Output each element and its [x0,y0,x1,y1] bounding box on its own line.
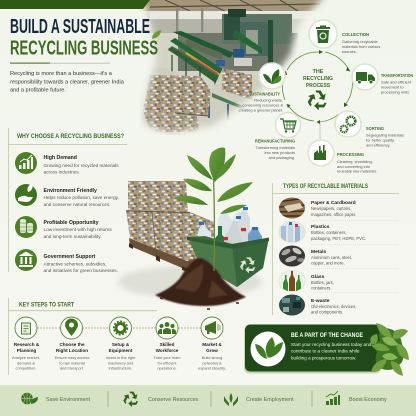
step: processing [308,140,377,174]
item: paper: Paper & Cardboard [311,200,356,206]
item: plastics: Bottles, containers, [311,230,347,235]
step: location: to raw material [59,360,85,366]
item: plastics [278,221,366,243]
heading: WHY CHOOSE A RECYCLING BUSINESS? [17,133,124,140]
panel: recycling process [239,20,413,174]
item: metals: Aluminum cans, steel, [311,255,352,260]
benefit: save environment: Save Environment [46,397,91,403]
step: setup [106,317,136,370]
item: profitable opportunity: and long-term sustainability. [44,234,102,239]
callout text: building a prosperous tomorrow. [291,356,356,360]
panel: why choose [8,128,127,273]
step: location: Right Location [56,348,88,353]
step: sustainability: Reducing waste, [254,98,283,102]
item: plastics: Plastics [311,224,330,230]
step: location: Ensure easy access [55,355,89,360]
plant [173,148,253,271]
step: workforce [153,317,181,370]
item: government support [15,249,118,273]
step: research: demand & [17,360,35,366]
step: location: Choose the [59,342,85,347]
benefit: boost economy: Boost Economy [349,397,387,403]
pallet [129,238,210,272]
step: sustainability: creating a greener planet. [239,108,283,112]
intro text: and a profitable future. [10,88,66,94]
title [10,16,158,60]
step: remanufacturing: Transforming materials [255,145,295,150]
step: remanufacturing: into new products [264,150,295,155]
step: workforce: Workforce [156,348,179,353]
item: plastics: packaging, PET, HDPE, PVC. [311,236,366,241]
step: sorting: SORTING [366,126,385,131]
icon: title leaf [152,30,161,39]
benefit: create employment: Create Employment [246,397,294,403]
item: government support: Government Support [44,254,96,260]
item: profitable opportunity: Profitable Opportunity [44,220,99,226]
icon: center recycle [305,91,327,112]
step: market: Market & [202,342,222,347]
step: processing: PROCESSING [337,152,365,157]
step: sorting: for better quality [366,138,394,142]
step: workforce: operations. [157,366,177,370]
item: metals: Metals [311,249,327,255]
step: setup: Invest in the right [106,355,136,360]
icon: decorative leaf cluster [370,323,409,376]
callout text: Start your recycling business today and [291,342,372,347]
step: research: Analyze market, [12,355,40,360]
callout text: contribute to a cleaner India while [291,348,360,354]
header photo: recycling plant [140,0,330,135]
title: BUILD A SUSTAINABLE [10,16,150,38]
item: paper: Newspapers, cartons, [311,206,352,211]
icon: bin recycle [238,257,255,275]
item: government support: Attractive schemes, subsidies, [44,262,107,266]
step: research: Planning [17,348,36,353]
item: environment friendly: and conserve natural resources. [44,202,110,207]
panel: key steps [8,298,226,375]
benefit: create employment [224,393,294,406]
item: environment friendly: Helps reduce pollution, save energy, [44,195,119,200]
step: workforce: Train your team [153,355,181,360]
connector [37,327,202,329]
step: setup: infrastructure. [109,366,132,370]
item: environment friendly [15,184,119,207]
icon: callout leaves [250,332,286,366]
step: transportation [352,64,413,94]
step: sustainability: conserving resources & [242,102,283,108]
center label: RECYCLING [303,76,333,82]
item: glass [278,270,334,292]
item: high demand [15,152,119,174]
item: profitable opportunity: Low investment with high returns [44,227,112,232]
bottles [198,207,262,252]
item: high demand: High Demand [44,155,77,161]
callout: be a part of the change [244,324,381,374]
step: remanufacturing [255,112,300,160]
step: location: and transport. [60,366,84,370]
step: setup: Setup & [112,342,130,347]
step: workforce: for efficient [158,360,177,366]
panel: recyclable materials [272,183,399,316]
item: metals [278,245,352,267]
item: government support: and initiatives for green businesses. [44,268,118,273]
intro text [10,71,125,94]
callout text: BE A PART OF THE CHANGE [291,332,363,339]
step: sustainability [239,63,285,112]
top green bar [0,0,150,9]
dividers [311,220,398,292]
step: market: Grow [206,348,218,353]
recycling bin [187,236,269,287]
step: setup: Equipment [109,348,133,353]
heading: KEY STEPS TO START [19,302,74,308]
step: sorting [335,111,404,148]
step: sorting: Segregating materials [366,132,404,138]
step: collection: Gathering recyclable [342,39,378,44]
step: transportation: processing units. [381,90,410,94]
step: workforce: Skilled [160,342,175,347]
step: sorting: and efficiency. [366,142,391,148]
benefit: save environment [21,393,91,404]
step: processing: Cleaning, shredding, [337,159,373,164]
cycle ring [282,50,352,141]
callout text [291,332,372,360]
item: high demand: across industries. [44,170,80,174]
item: paper: magazines, office paper. [311,212,356,217]
step: research: competition. [16,366,36,370]
item: e-waste: E-waste [311,298,330,304]
step: market: Build strong [202,355,222,360]
step: market: expand steadily. [198,366,226,370]
title underline [10,62,110,64]
step: research [12,317,40,370]
item: e-waste: Old electronics, devices, [311,304,356,309]
step: remanufacturing: and packaging. [269,155,295,160]
step: sustainability: SUSTAINABILITY [249,92,280,96]
hero illustration: bales, bin, soil, plant [118,148,269,309]
heading: TYPES OF RECYCLABLE MATERIALS [283,183,369,190]
soil pile [155,258,246,309]
item: environment friendly: Environment Friendly [44,188,97,194]
ground shadow [118,266,262,298]
center label [303,69,333,89]
item: profitable opportunity [15,216,112,239]
step: market [198,317,226,370]
item: metals: copper, and more. [311,260,345,266]
step: collection: COLLECTION [342,32,369,37]
benefit: conserve resources: Conserve Resources [148,397,199,403]
item: high demand: Growing need for recycled materials [44,163,119,168]
step: collection: sources. [342,49,357,54]
center label: THE [313,69,324,75]
title: RECYCLING BUSINESS [10,38,158,60]
step: research: Research & [14,342,40,347]
step: transportation: movement to [381,84,404,90]
intro text: responsibility towards a cleaner, greener India [10,80,125,86]
item: e-waste [278,294,356,316]
step: setup: machinery and [108,360,133,366]
item: glass: Glass [311,274,325,280]
step: transportation: Safe and efficient [381,80,412,84]
footer band [0,385,416,416]
item: e-waste: and components. [311,310,343,314]
item: glass: containers. [311,286,331,290]
item: paper [278,197,356,219]
intro text: Recycling is more than a business—it's a [10,71,113,77]
item: glass: Bottles, jars, [311,280,334,285]
step: remanufacturing: REMANUFACTURING [255,138,296,144]
step: processing: reusable raw materials. [337,168,377,174]
step: market: networks & [202,360,222,366]
step: collection [309,20,380,54]
benefit: conserve resources [121,392,199,408]
bales [126,181,216,262]
step: collection: materials from various [342,44,380,49]
step: processing: and converting into [337,164,370,169]
benefit: boost economy [326,391,387,405]
step: location [55,317,89,370]
center label: PROCESS [306,83,330,89]
